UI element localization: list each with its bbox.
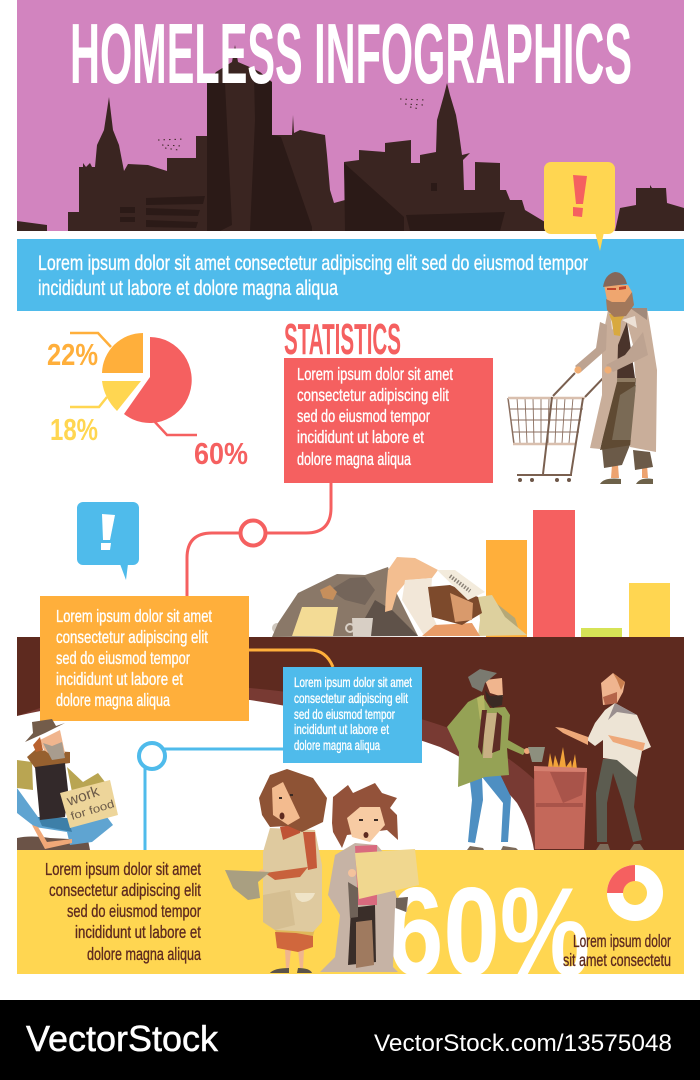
panel: red text box: consectetur adipiscing elit xyxy=(297,385,449,405)
legs and shoes xyxy=(285,950,304,968)
coat xyxy=(263,828,322,932)
label 18%: 18% xyxy=(50,412,98,447)
illustration: child with cardboard sign xyxy=(320,783,419,972)
shirt xyxy=(35,763,68,820)
stump xyxy=(17,836,90,850)
undershirt xyxy=(402,578,440,637)
inner coat xyxy=(348,882,408,918)
panel: orange text box: dolore magna aliqua xyxy=(56,690,170,710)
icon: yellow speech bubble with exclamation xyxy=(544,162,615,251)
connector: red line and node xyxy=(187,483,331,596)
text: yellow panel paragraph: dolore magna aliqua xyxy=(87,944,201,964)
text: STATISTICS xyxy=(284,315,401,364)
illustration: man pushing shopping cart xyxy=(508,272,657,484)
arms xyxy=(555,727,645,751)
footer url: VectorStock.com/13575048 xyxy=(374,1030,672,1057)
coat mound xyxy=(272,567,418,637)
panel: blue text box: incididunt ut labore et xyxy=(294,721,389,737)
face xyxy=(272,782,300,825)
arm under head xyxy=(422,623,480,636)
jacket xyxy=(17,760,33,790)
intro text: incididunt ut labore et dolore magna aliqua xyxy=(38,276,338,300)
arm xyxy=(385,557,438,612)
bowl xyxy=(225,870,270,900)
scarf xyxy=(609,312,627,336)
hat xyxy=(25,719,65,742)
trousers xyxy=(596,759,642,842)
connector: orange line xyxy=(249,650,333,667)
intro text xyxy=(38,251,588,300)
blue intro band xyxy=(17,239,684,311)
face xyxy=(485,678,503,697)
sign xyxy=(60,780,118,828)
coat xyxy=(447,695,526,787)
trousers xyxy=(602,445,653,470)
trousers xyxy=(348,905,376,965)
drape and box xyxy=(490,603,520,634)
yellow bottom panel xyxy=(17,850,684,974)
illustration: man in green coat with cup xyxy=(447,669,545,850)
illustration: woman with bowl xyxy=(225,769,327,973)
panel: blue text box: consectetur adipiscing elit xyxy=(294,690,408,706)
birds xyxy=(158,99,426,150)
sign: work xyxy=(64,783,102,810)
panel: blue text box: dolore magna aliqua xyxy=(294,737,380,753)
coat xyxy=(590,308,657,452)
scarf xyxy=(478,710,502,755)
ankles and shoes xyxy=(611,465,648,478)
hair xyxy=(332,783,398,848)
footer logo: VectorStock xyxy=(26,1018,219,1059)
panel: red text box: Lorem ipsum dolor sit amet xyxy=(297,364,453,384)
panel: orange text box: Lorem ipsum dolor sit amet xyxy=(56,606,212,626)
sign: for food xyxy=(69,798,116,823)
panel: red text box: sed do eiusmod tempor xyxy=(297,406,430,426)
panel: orange text box xyxy=(40,596,249,721)
hand xyxy=(348,869,356,877)
scarf xyxy=(303,832,317,870)
panel: blue text box: Lorem ipsum dolor sit amet xyxy=(294,674,412,690)
hair and beard xyxy=(428,585,482,625)
label 22%: 22% xyxy=(47,337,98,372)
illustration: barrel with fire xyxy=(534,747,587,849)
illustration: man holding work for food sign xyxy=(17,719,118,850)
face xyxy=(40,730,65,758)
head xyxy=(604,285,632,310)
panel: red text box: incididunt ut labore et xyxy=(297,427,424,447)
hair xyxy=(259,769,327,832)
shirt xyxy=(355,845,377,905)
bar chart xyxy=(486,510,670,638)
footer bar xyxy=(0,1000,700,1080)
shopping cart xyxy=(508,373,607,482)
text: yellow panel paragraph: incididunt ut labore et xyxy=(75,922,201,942)
panel: orange text box: consectetur adipiscing elit xyxy=(56,627,208,647)
skyline silhouette xyxy=(17,45,550,231)
hat xyxy=(468,669,497,692)
text: yellow panel paragraph: sed do eiusmod tempor xyxy=(67,901,201,921)
donut chart xyxy=(607,865,663,921)
stone xyxy=(272,623,282,633)
connector: blue line and node xyxy=(139,743,283,850)
newspaper xyxy=(437,570,485,600)
skirt xyxy=(275,932,313,952)
panel: red text box: dolore magna aliqua xyxy=(297,449,411,469)
panel: blue text box: sed do eiusmod tempor xyxy=(294,706,395,722)
face xyxy=(347,807,385,842)
shirt xyxy=(587,703,651,777)
jeans xyxy=(468,757,511,843)
label 60%: 60% xyxy=(194,436,248,471)
dark brown ground panel xyxy=(17,637,684,850)
text: yellow panel paragraph xyxy=(45,859,201,964)
sign xyxy=(355,849,419,899)
icon: blue speech bubble with exclamation xyxy=(77,502,139,580)
panel: orange text box: sed do eiusmod tempor xyxy=(56,648,190,668)
collar xyxy=(27,750,70,768)
text: yellow panel paragraph: Lorem ipsum dolor sit amet xyxy=(45,859,201,879)
arms xyxy=(575,322,648,372)
text: yellow panel paragraph: consectetur adipiscing elit xyxy=(49,880,201,900)
shirt and belt xyxy=(610,322,635,378)
illustration: sleeping man xyxy=(272,557,527,637)
panel: orange text box: incididunt ut labore et xyxy=(56,669,183,689)
text: donut caption xyxy=(563,931,671,970)
big number 60%: 60% xyxy=(387,863,590,1002)
header panel: city skyline xyxy=(17,0,684,231)
hand and cup xyxy=(524,748,530,754)
coat lining xyxy=(600,378,636,450)
head xyxy=(601,673,625,705)
jeans xyxy=(17,788,113,845)
panel: red text box xyxy=(284,358,493,483)
illustration: bald man gesturing xyxy=(555,673,651,850)
shirt xyxy=(483,713,498,758)
cardboard xyxy=(292,607,338,636)
pie chart xyxy=(47,333,248,471)
coat xyxy=(320,843,408,972)
foot xyxy=(32,825,72,849)
cup xyxy=(352,618,373,636)
arm xyxy=(265,867,308,880)
panel: blue text box xyxy=(283,667,422,763)
patch xyxy=(320,585,337,600)
